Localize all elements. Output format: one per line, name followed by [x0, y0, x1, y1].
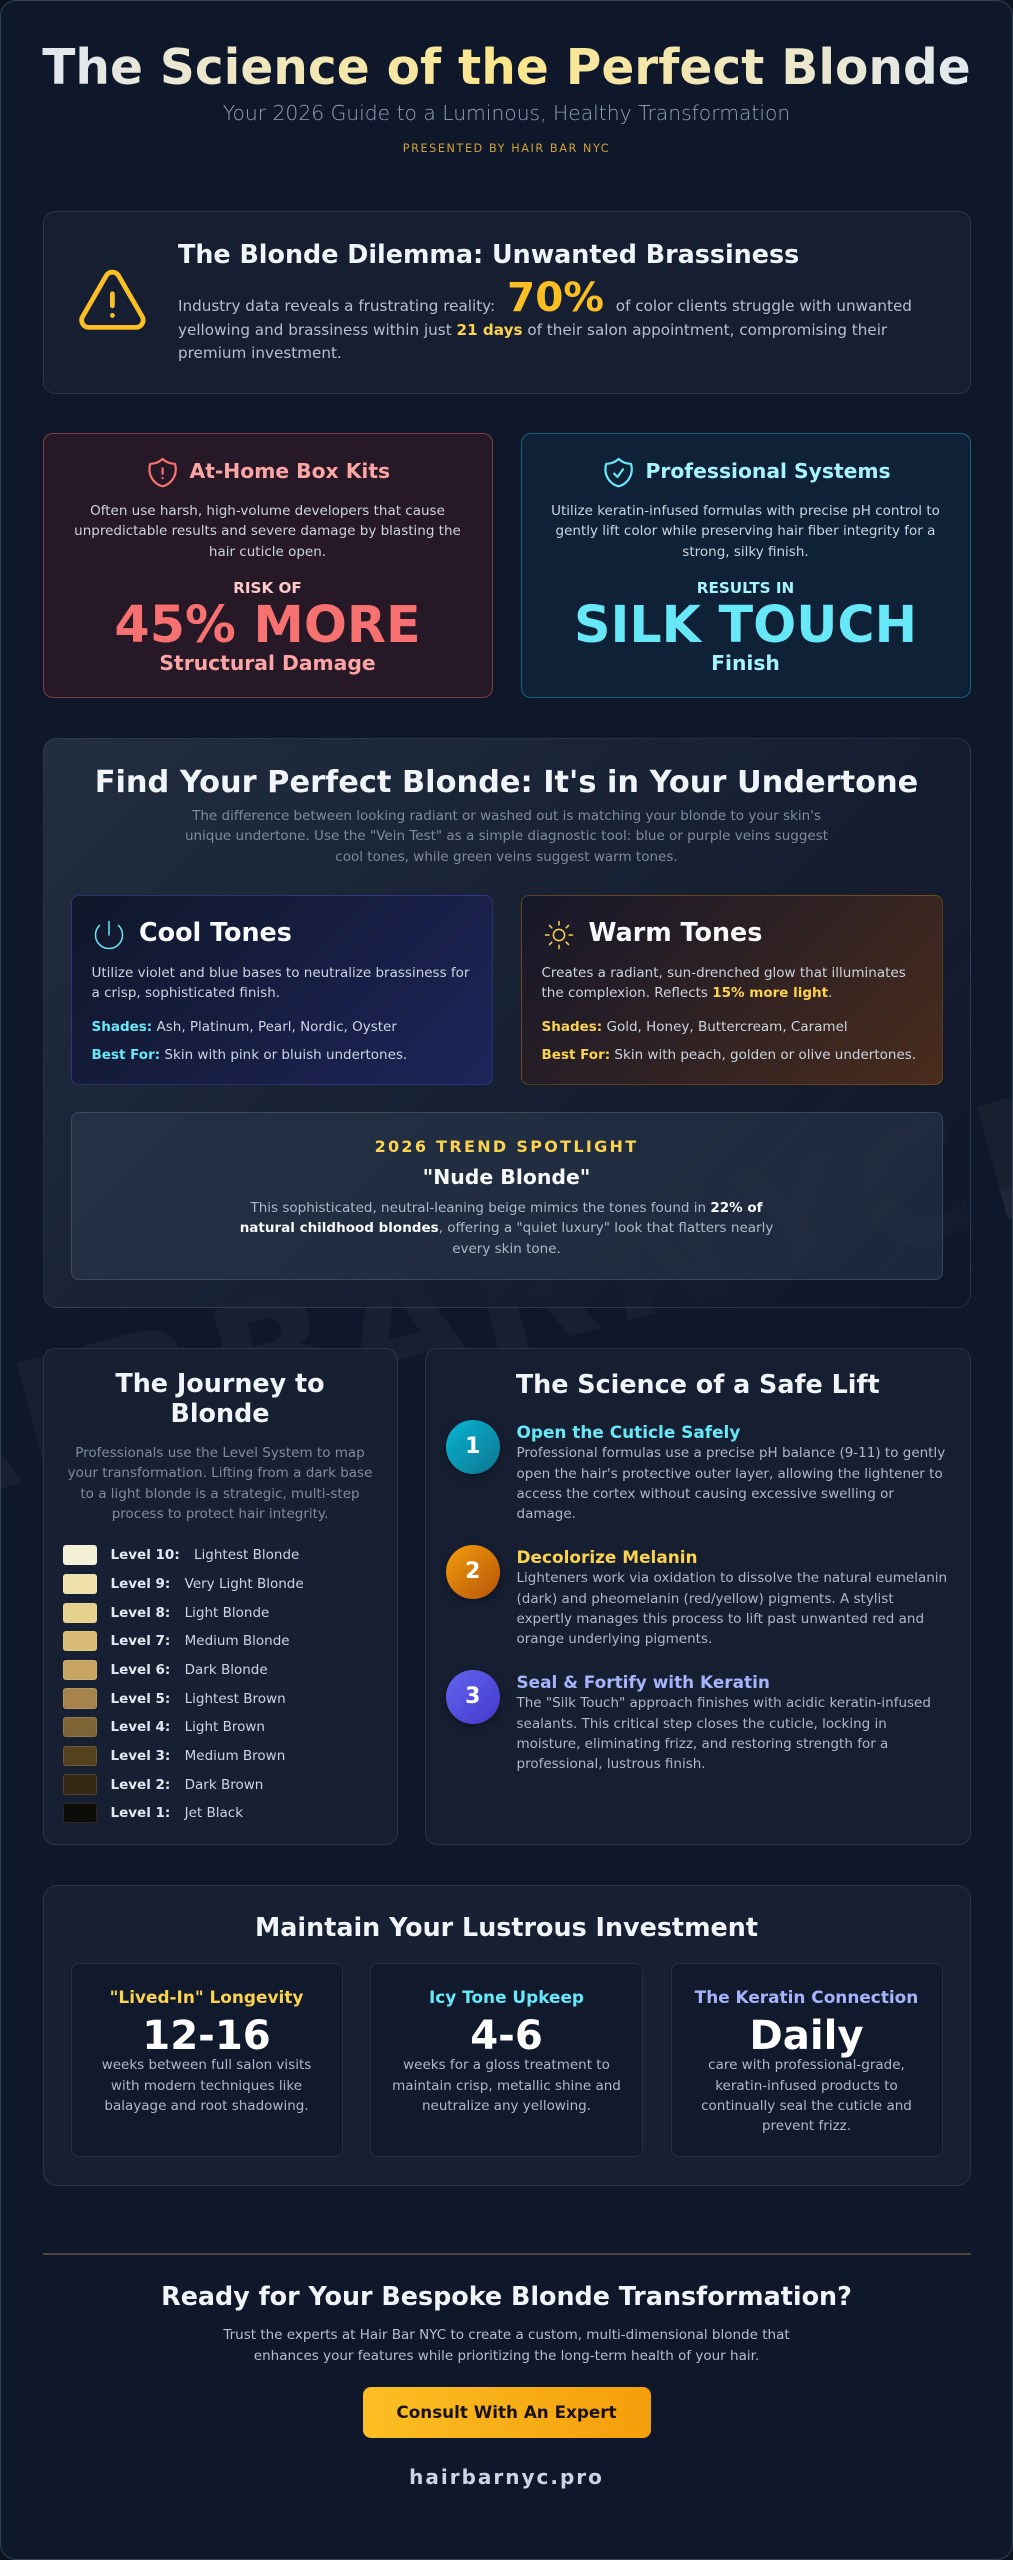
- step 2 text: orange underlying pigments.: [516, 1631, 712, 1647]
- cool shades: Shades: Ash, Platinum, Pearl, Nordic, Oyster: [92, 1019, 397, 1035]
- professional text: gently lift color while preserving hair fiber integrity for a: [556, 523, 935, 539]
- swatch: level 4: [62, 1717, 96, 1737]
- spotlight title: "Nude Blonde": [423, 1165, 590, 1189]
- step 1 text: access the cortex without causing excessive swelling or: [516, 1486, 894, 1502]
- cool text: Utilize violet and blue bases to neutralize brassiness for: [92, 965, 469, 981]
- keratin text: continually seal the cuticle and: [701, 2098, 912, 2114]
- step 3 title: Seal & Fortify with Keratin: [516, 1672, 770, 1692]
- step 3 text: sealants. This critical step closes the cuticle, locking in: [516, 1716, 887, 1732]
- professional text: Utilize keratin-infused formulas with precise pH control to: [551, 503, 940, 519]
- step 1 number: [446, 1420, 500, 1474]
- panel: warm tones: [520, 895, 942, 1085]
- swatch: level 8: [62, 1602, 96, 1623]
- panel: cool tones: [70, 895, 492, 1085]
- label: level 6: Level 6: Dark Blonde: [110, 1662, 268, 1678]
- swatch: level 6: [62, 1660, 96, 1680]
- cool text: [92, 965, 470, 1001]
- step 1 text: open the hair's protective outer layer, allowing the lightener to: [516, 1466, 943, 1482]
- keratin title: The Keratin Connection: [695, 1987, 918, 2007]
- label: level 9: Level 9: Very Light Blonde: [110, 1576, 304, 1592]
- swatch: level 1: [62, 1803, 96, 1823]
- journey heading: [115, 1368, 325, 1428]
- icy text: neutralize any yellowing.: [422, 2098, 591, 2114]
- professional heading: Professional Systems: [646, 459, 891, 483]
- spotlight label: 2026 TREND SPOTLIGHT: [375, 1136, 638, 1156]
- structural damage: Structural Damage: [159, 651, 376, 675]
- step 1 text: Professional formulas use a precise pH balance (9-11) to gently: [516, 1445, 945, 1461]
- undertone intro: [185, 808, 828, 865]
- kits text: Often use harsh, high-volume developers that cause: [90, 503, 445, 519]
- website: hairbarnyc.pro: [409, 2465, 604, 2489]
- longevity title: "Lived-In" Longevity: [110, 1987, 303, 2007]
- label: level 5: Level 5: Lightest Brown: [110, 1691, 286, 1707]
- icy text: [392, 2057, 621, 2114]
- presented by: PRESENTED BY HAIR BAR NYC: [403, 142, 610, 155]
- journey text: Professionals use the Level System to map: [75, 1445, 365, 1461]
- card: keratin: [670, 1963, 942, 2157]
- professional text: [551, 503, 940, 560]
- cool text: a crisp, sophisticated finish.: [92, 985, 280, 1001]
- icon: power: [94, 920, 124, 950]
- undertone intro: cool tones, while green veins suggest warm tones.: [335, 849, 678, 865]
- journey heading: The Journey to: [115, 1368, 325, 1398]
- panel: blonde dilemma: [42, 211, 970, 394]
- risk label: RISK OF: [233, 578, 302, 596]
- cool best for: Best For: Skin with pink or bluish undertones.: [92, 1046, 407, 1062]
- longevity number: 12-16: [142, 2013, 271, 2059]
- subtitle: Your 2026 Guide to a Luminous, Healthy Transformation: [223, 101, 790, 125]
- swatch: level 7: [62, 1631, 96, 1651]
- label: level 8: Level 8: Light Blonde: [110, 1605, 269, 1621]
- step 1 text: [516, 1445, 945, 1522]
- panel: trend spotlight: [70, 1112, 942, 1280]
- longevity text: [102, 2057, 311, 2114]
- undertone intro: unique undertone. Use the "Vein Test" as a simple diagnostic tool: blue or purple veins suggest: [185, 828, 828, 844]
- dilemma heading: The Blonde Dilemma: Unwanted Brassiness: [178, 238, 799, 268]
- label: level 3: Level 3: Medium Brown: [110, 1748, 285, 1764]
- panel: science of a safe lift: [425, 1348, 970, 1845]
- professional text: strong, silky finish.: [682, 544, 809, 560]
- keratin number: Daily: [749, 2013, 864, 2059]
- swatch: level 10: [62, 1545, 96, 1565]
- keratin text: keratin-infused products to: [715, 2078, 898, 2094]
- icon: sun: [544, 920, 574, 950]
- journey text: your transformation. Lifting from a dark base: [68, 1465, 372, 1481]
- step 3 text: professional, lustrous finish.: [516, 1756, 706, 1772]
- call to action: [42, 2253, 970, 2503]
- step 2 text: Lighteners work via oxidation to dissolve the natural eumelanin: [516, 1570, 947, 1586]
- cta heading: Ready for Your Bespoke Blonde Transformation?: [161, 2281, 852, 2311]
- step 2 text: [516, 1570, 947, 1647]
- keratin text: care with professional-grade,: [708, 2057, 905, 2073]
- label: level 7: Level 7: Medium Blonde: [110, 1633, 290, 1649]
- panel: professional systems: [520, 433, 970, 698]
- journey text: to a light blonde is a strategic, multi-step: [80, 1486, 360, 1502]
- label: level 1: Level 1: Jet Black: [110, 1805, 243, 1821]
- step 2 title: Decolorize Melanin: [516, 1547, 698, 1567]
- label: level 10: Level 10: Lightest Blonde: [110, 1547, 299, 1563]
- step 3 text: The "Silk Touch" approach finishes with acidic keratin-infused: [516, 1695, 931, 1711]
- swatch: level 5: [62, 1688, 96, 1709]
- step 3 text: moisture, eliminating frizz, and restoring strength for a: [516, 1736, 888, 1752]
- step 2 number: [446, 1544, 500, 1598]
- kits text: unpredictable results and severe damage by blasting the: [74, 523, 461, 539]
- warm text: [542, 965, 906, 1001]
- step 1 text: damage.: [516, 1506, 576, 1522]
- step 2 text: (dark) and pheomelanin (red/yellow) pigments. A stylist: [516, 1591, 894, 1607]
- warm text: Creates a radiant, sun-drenched glow that illuminates: [542, 965, 906, 981]
- spotlight text: every skin tone.: [452, 1241, 561, 1257]
- 45% more stat: 45% MORE: [114, 595, 421, 654]
- spotlight text: [240, 1200, 773, 1257]
- kits heading: At-Home Box Kits: [190, 459, 390, 483]
- icy text: maintain crisp, metallic shine and: [392, 2078, 621, 2094]
- keratin text: [701, 2057, 912, 2134]
- card: icy tone: [370, 1963, 643, 2157]
- undertone intro: The difference between looking radiant or washed out is matching your blonde to your skin's: [192, 808, 821, 824]
- longevity text: with modern techniques like: [111, 2078, 302, 2094]
- cta text: [223, 2327, 790, 2364]
- cta button: [362, 2387, 650, 2438]
- spotlight text: This sophisticated, neutral-leaning beige mimics the tones found in 22% of: [250, 1200, 763, 1216]
- step 3 text: [516, 1695, 931, 1772]
- dilemma text: [178, 273, 912, 362]
- panel: undertone: [42, 738, 970, 1308]
- title: The Science of the Perfect Blonde: [42, 40, 971, 96]
- icon: shield check: [604, 458, 633, 488]
- warm text: the complexion. Reflects 15% more light.: [542, 985, 832, 1001]
- warm heading: Warm Tones: [588, 917, 762, 947]
- spotlight text: natural childhood blondes, offering a "quiet luxury" look that flatters nearly: [240, 1220, 773, 1236]
- journey text: process to protect hair integrity.: [112, 1506, 328, 1522]
- panel: at-home box kits: [42, 433, 492, 698]
- longevity text: weeks between full salon visits: [102, 2057, 311, 2073]
- icon: shield warning: [148, 458, 177, 488]
- step 1 number: 1: [465, 1434, 480, 1458]
- finish: Finish: [711, 651, 780, 675]
- silk touch stat: SILK TOUCH: [574, 595, 917, 654]
- label: level 2: Level 2: Dark Brown: [110, 1776, 263, 1792]
- swatch: level 2: [62, 1774, 96, 1795]
- cta text: Trust the experts at Hair Bar NYC to create a custom, multi-dimensional blonde that: [223, 2327, 790, 2343]
- undertone heading: Find Your Perfect Blonde: It's in Your Undertone: [95, 765, 918, 800]
- panel: maintain investment: [42, 1885, 970, 2186]
- step 1 title: Open the Cuticle Safely: [516, 1422, 740, 1442]
- step 2 number: 2: [465, 1558, 480, 1584]
- results label: RESULTS IN: [697, 578, 794, 596]
- step 2 text: expertly manages this process to lift past unwanted red and: [516, 1611, 924, 1627]
- warm shades: Shades: Gold, Honey, Buttercream, Caramel: [542, 1019, 848, 1035]
- dilemma text: yellowing and brassiness within just 21 days of their salon appointment, compromising their: [178, 320, 887, 338]
- panel: journey to blonde: [42, 1348, 398, 1845]
- label: level 4: Level 4: Light Brown: [110, 1719, 265, 1735]
- swatch: level 3: [62, 1746, 96, 1766]
- kits text: hair cuticle open.: [209, 544, 326, 560]
- kits text: [74, 503, 461, 560]
- keratin text: prevent frizz.: [762, 2118, 851, 2134]
- journey text: [68, 1445, 372, 1522]
- step 3 number: [446, 1670, 500, 1724]
- step 3 number: 3: [465, 1684, 480, 1708]
- icy text: weeks for a gloss treatment to: [403, 2057, 610, 2073]
- icy title: Icy Tone Upkeep: [429, 1987, 584, 2007]
- level chart: [63, 1545, 304, 1823]
- journey heading: Blonde: [170, 1398, 269, 1428]
- cool heading: Cool Tones: [139, 917, 292, 947]
- cta text: enhances your features while prioritizing the long-term health of your hair.: [254, 2348, 759, 2364]
- warm best for: Best For: Skin with peach, golden or olive undertones.: [542, 1046, 916, 1062]
- longevity text: balayage and root shadowing.: [104, 2098, 309, 2114]
- icon: warning triangle: [79, 270, 146, 330]
- maintain heading: Maintain Your Lustrous Investment: [255, 1912, 758, 1942]
- science heading: The Science of a Safe Lift: [516, 1368, 880, 1398]
- cta button: Consult With An Expert: [396, 2402, 617, 2422]
- icy number: 4-6: [470, 2013, 543, 2059]
- dilemma text: premium investment.: [178, 344, 342, 362]
- dilemma text: Industry data reveals a frustrating reality: 70% of color clients struggle with unwanted: [178, 273, 912, 321]
- swatch: level 9: [62, 1574, 96, 1594]
- card: longevity: [70, 1963, 342, 2157]
